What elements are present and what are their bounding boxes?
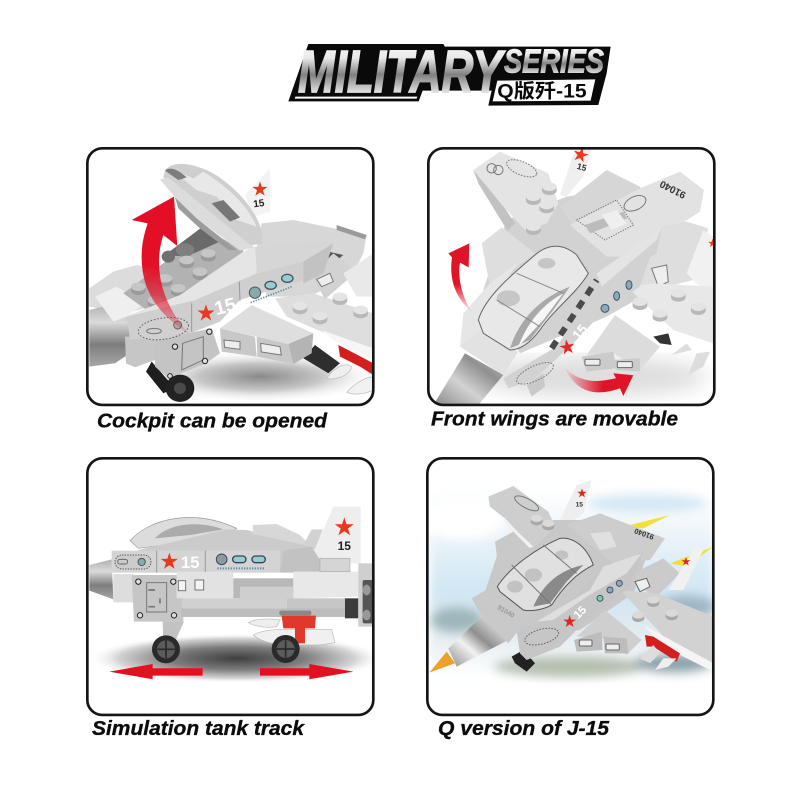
nose top [460, 328, 518, 375]
front gear box [155, 328, 220, 378]
port windows [249, 287, 261, 298]
front strut and wheel [163, 622, 184, 642]
right arrow [260, 664, 353, 679]
fuselage base fill [483, 520, 647, 637]
red arrow side [565, 368, 633, 396]
rear wing [627, 283, 713, 343]
red arrow [132, 197, 190, 335]
logo: Military Series: Q版歼-15 [497, 81, 587, 103]
fuselage side [503, 228, 662, 388]
upper wing [488, 486, 555, 548]
tail hinge [320, 558, 350, 572]
left front wing [495, 532, 535, 580]
caption: Q version: Q version of J-15 [438, 718, 610, 740]
rear engine [358, 563, 373, 627]
emblem oval [138, 317, 189, 340]
missiles and red pylon [248, 619, 280, 627]
red arrow up [448, 243, 472, 312]
star and 15 [161, 553, 178, 569]
nose cone [89, 303, 130, 367]
gear and missiles [653, 333, 672, 345]
caption: wings: Front wings are movable [431, 408, 678, 430]
canopy [478, 246, 588, 350]
caption: track: Simulation tank track [92, 718, 305, 740]
panel: cockpit can be opened: 15 [212, 294, 239, 320]
emblem [115, 555, 151, 569]
nose top [472, 583, 532, 643]
canopy [130, 518, 237, 548]
gear [512, 650, 535, 672]
tail fin [245, 168, 270, 217]
rear wing [275, 294, 372, 348]
red pylon and missiles [645, 635, 680, 662]
caption: cockpit: Cockpit can be opened [97, 410, 328, 432]
tail fin [312, 507, 361, 563]
front wheel [146, 362, 168, 394]
upper fuselage [138, 529, 312, 572]
right intake and fin [633, 558, 680, 600]
canopy [497, 538, 593, 611]
nose cone [448, 615, 508, 667]
panel: front wings are movable: 15 [576, 161, 588, 173]
sky backdrop [423, 490, 717, 677]
engine boxes [587, 315, 660, 370]
fuselage side [517, 552, 643, 660]
panel: Q version of J-15 [417, 458, 723, 715]
fuselage side [127, 272, 266, 340]
rear back [574, 170, 640, 196]
left arrow [109, 664, 203, 679]
panel: simulation tank track [87, 458, 385, 715]
front wing [482, 227, 535, 287]
exhaust flames [623, 515, 670, 528]
cockpit floor with studs [124, 238, 244, 309]
fuselage top rail [127, 246, 256, 316]
upper wing [473, 152, 558, 230]
panel: Q version of J-15: 91040 [633, 526, 655, 542]
nose cone [433, 353, 503, 405]
tail fin [558, 480, 592, 525]
logo: Military Series: MILITARY [298, 38, 506, 105]
panel: simulation tank track: 15 [181, 553, 200, 572]
open canopy [163, 164, 263, 247]
nose side block [125, 337, 155, 367]
panel: Q version of J-15: 91040 [496, 604, 516, 620]
panel: front wings are movable: 15 [569, 321, 591, 343]
far wing [89, 265, 144, 311]
lower body [113, 574, 133, 602]
red star and 15 [197, 304, 215, 321]
intake [320, 253, 347, 299]
rear fuselage [257, 220, 367, 297]
right structure [640, 222, 708, 287]
stepped dark gaps [552, 280, 597, 348]
fuselage base fill [483, 187, 660, 353]
panel: cockpit can be opened: 15 [253, 198, 266, 210]
tail fin [560, 149, 592, 197]
port windows [216, 554, 227, 565]
panel: front wings are movable [428, 145, 717, 405]
panel: cockpit can be opened [87, 148, 383, 405]
panel: front wings are movable: 91040 [658, 177, 688, 200]
rear plate [567, 513, 665, 563]
emblem and markings [516, 362, 554, 384]
engine boxes [220, 305, 313, 344]
panel: Q version of J-15: 15 [576, 502, 583, 509]
logo: Military Series: SERIES [504, 44, 604, 81]
left rail [460, 270, 513, 346]
nose [89, 559, 113, 599]
panel: simulation tank track: 15 [338, 539, 351, 553]
panel: Q version of J-15: 15 [572, 604, 589, 622]
rear wing [620, 590, 713, 672]
side band [112, 551, 280, 573]
rear wheel [272, 635, 300, 663]
rear gear, red pylon and missiles [303, 345, 340, 373]
engine boxes [577, 610, 642, 655]
